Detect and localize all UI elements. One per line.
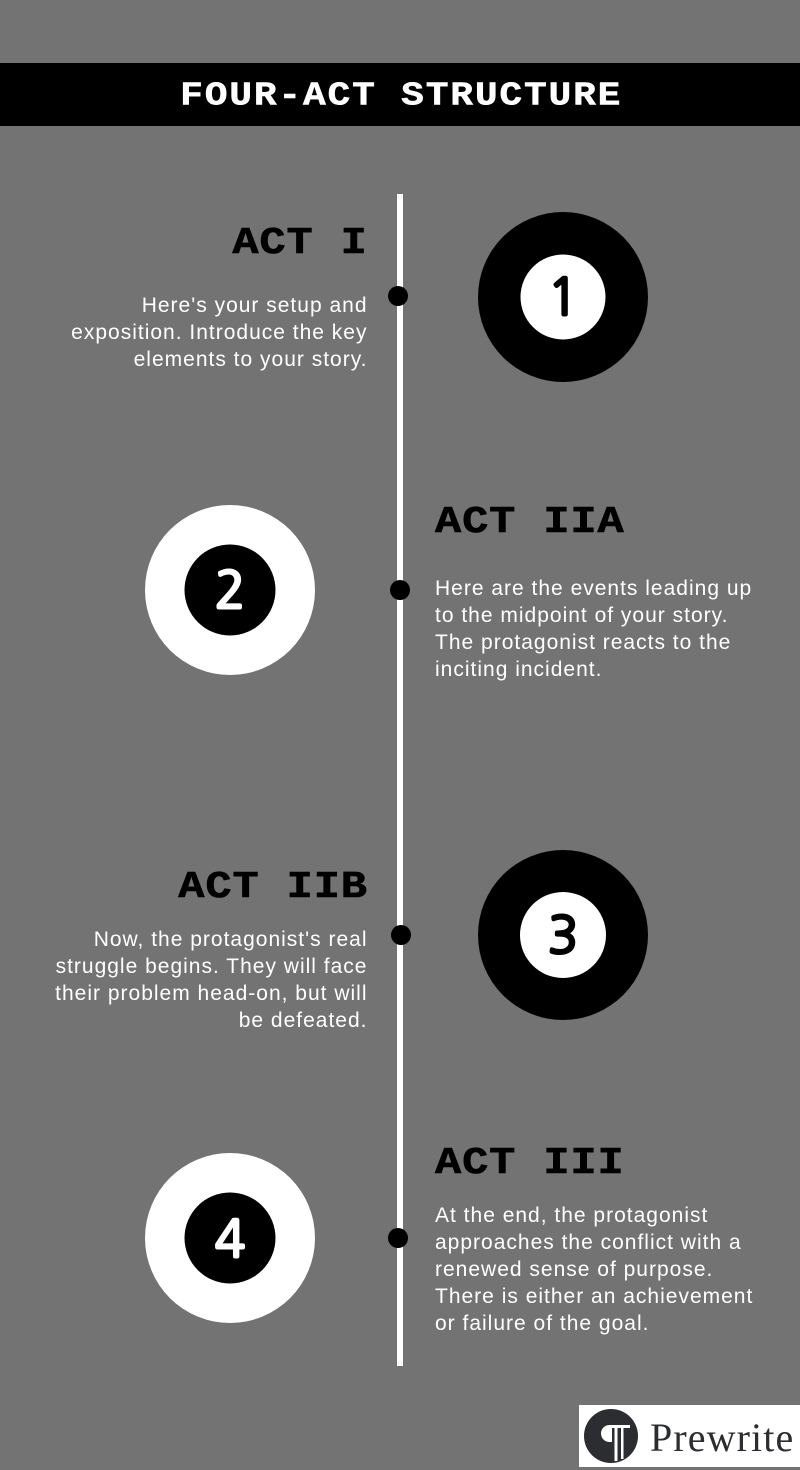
text: Act IIB description: struggle begins. They will face	[56, 955, 368, 978]
timeline node 2	[390, 580, 410, 600]
text: Act IIB description	[55, 928, 368, 1032]
heading: Act IIB: ACT IIB	[178, 866, 368, 909]
icon: Prewrite mark	[584, 1409, 638, 1463]
icon: number 1 circle	[478, 212, 648, 382]
text: Act III description: There is either an achievement	[435, 1284, 753, 1308]
text: Act I description	[71, 294, 368, 371]
text: Act IIA description	[435, 577, 752, 681]
text: Act I description: elements to your story.	[134, 348, 368, 371]
heading: Act I: ACT I	[233, 222, 368, 265]
icon: number 3 circle: 3	[548, 910, 578, 960]
title text: FOUR-ACT STRUCTURE	[180, 78, 622, 114]
timeline node 1	[388, 286, 408, 306]
text: Act IIA description: to the midpoint of your story.	[435, 604, 728, 627]
timeline node 4	[388, 1228, 408, 1248]
text: Act III description	[435, 1204, 753, 1334]
icon: number 4 circle	[145, 1153, 315, 1323]
text: Act IIA description: Here are the events leading up	[435, 577, 752, 600]
wordmark: Prewrite	[650, 1415, 794, 1460]
icon: number 3 circle	[478, 850, 648, 1020]
text: Act III description: or failure of the goal.	[435, 1312, 649, 1334]
text: Act I description: exposition. Introduce the key	[71, 321, 368, 344]
text: Act IIA description: The protagonist reacts to the	[435, 631, 731, 654]
icon: number 2 circle: 2	[215, 566, 245, 616]
text: Act III description: approaches the conflict with a	[435, 1230, 742, 1254]
heading: Act III: ACT III	[435, 1142, 625, 1185]
heading: Act IIA: ACT IIA	[435, 501, 625, 544]
icon: number 2 circle	[145, 505, 315, 675]
text: Act IIB description: their problem head-on, but will	[55, 982, 368, 1005]
text: Act IIB description: be defeated.	[239, 1009, 368, 1032]
text: Act I description: Here's your setup and	[142, 294, 368, 317]
title banner	[0, 63, 800, 126]
text: Act III description: renewed sense of purpose.	[435, 1258, 713, 1280]
logo: Prewrite	[579, 1405, 800, 1467]
timeline node 3	[391, 925, 411, 945]
timeline line	[397, 194, 403, 1366]
text: Act IIA description: inciting incident.	[435, 658, 602, 681]
text: Act IIB description: Now, the protagonist's real	[94, 928, 368, 951]
icon: number 4 circle: 4	[215, 1214, 245, 1264]
text: Act III description: At the end, the protagonist	[435, 1204, 708, 1226]
icon: number 1 circle: 1	[548, 272, 578, 322]
